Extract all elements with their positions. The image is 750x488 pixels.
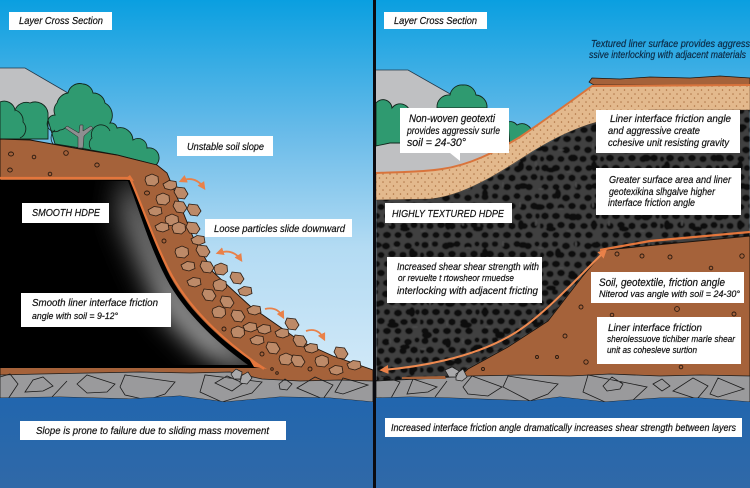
tree trunk [65,125,93,148]
soil pebbles [8,151,312,374]
callout: liner interface friction angle: and aggressive create [608,125,700,137]
sky [376,0,750,380]
orange liner interface line [0,175,267,369]
callout: liner interface friction [597,317,741,364]
callout: greater surface area: interface friction angle [608,198,695,209]
label: highly textured HDPE [385,203,512,223]
callout: liner interface friction angle [596,110,740,153]
lower soil [458,236,750,378]
center divider [373,0,376,488]
callout: liner interface friction angle: cchesive unit resisting gravity [608,138,730,149]
callout: soil geotextile friction angle: Soil, geotextile, friction angle [599,277,725,289]
gravel foundation [0,369,373,402]
label: unstable soil slope: Unstable soil slope [187,141,264,153]
label: loose particles: Loose particles slide downward [214,223,346,235]
trees [376,85,532,147]
callout: increased shear strength: interlocking with adjacent fricting [397,285,538,297]
callout: non-woven geotextile: provides aggressiv surle [406,126,500,137]
panel: textured HDPE liner [376,0,750,488]
callout: liner interface friction angle: Liner interface friction angle [610,113,731,125]
top soil strip [589,76,750,85]
callout: non-woven geotextile [400,108,509,161]
loose rocks [145,174,361,375]
label: smooth HDPE: SMOOTH HDPE [32,207,101,219]
label: highly textured HDPE: HIGHLY TEXTURED HDPE [392,208,505,220]
callout: increased shear strength: Increased shear shear strength with [397,261,539,273]
label: loose particles [205,219,352,237]
callout: slope failure: Slope is prone to failure due to sliding mass movement [36,425,270,437]
textured HDPE layer [376,108,750,382]
callout: greater surface area: geotexikina slhgalve higher [609,187,716,198]
orange line on lower soil [600,232,750,250]
callout: greater surface area [596,168,741,215]
soil slope [0,139,373,382]
caption: textured liner surface [589,38,750,61]
gravel foundation [376,367,750,402]
callout: greater surface area: Greater surface area and liner [609,174,731,186]
callout: soil geotextile friction angle [591,272,744,303]
label: unstable soil slope [177,136,273,156]
callout: smooth liner friction: Smooth liner interface friction [32,297,158,309]
soil pebbles [482,252,744,370]
callout: liner interface friction: Liner interface friction [608,322,702,334]
mountain [0,68,68,118]
panel: smooth HDPE liner [0,0,373,488]
callout: non-woven geotextile: Non-woven geotexti [409,113,495,125]
HDPE smooth liner [0,180,260,368]
orange surface line [376,85,750,173]
water [0,396,373,488]
motion arrows [181,179,324,339]
label: smooth HDPE [22,203,109,223]
water [376,397,750,488]
label: layer cross section right: Layer Cross Section [394,15,477,27]
callout: increased interface friction angle [385,418,742,437]
label: layer cross section right [384,12,487,29]
callout: liner interface friction: sherolessuove tichiber marle shear [607,334,736,345]
sky [0,0,373,380]
shear strength double arrow [382,251,605,370]
callout: slope failure [20,421,286,440]
label: layer cross section left: Layer Cross Section [19,15,103,27]
mountain [376,70,530,178]
label: layer cross section left [9,12,112,30]
callout: increased shear strength [387,257,542,303]
callout: non-woven geotextile: soil = 24-30° [407,137,467,149]
non-woven geotextile sand layer [376,85,750,200]
callout: smooth liner friction [21,293,171,327]
callout: smooth liner friction: angle with soil = 9-12° [32,311,118,322]
callout: liner interface friction: unit as cohesleve surtion [607,345,697,356]
trees [0,84,159,165]
callout: soil geotextile friction angle: Niterod vas angle with soil = 24-30° [599,289,740,300]
callout: increased shear strength: or revuelte t rtowsheor rmuedse [398,273,514,283]
